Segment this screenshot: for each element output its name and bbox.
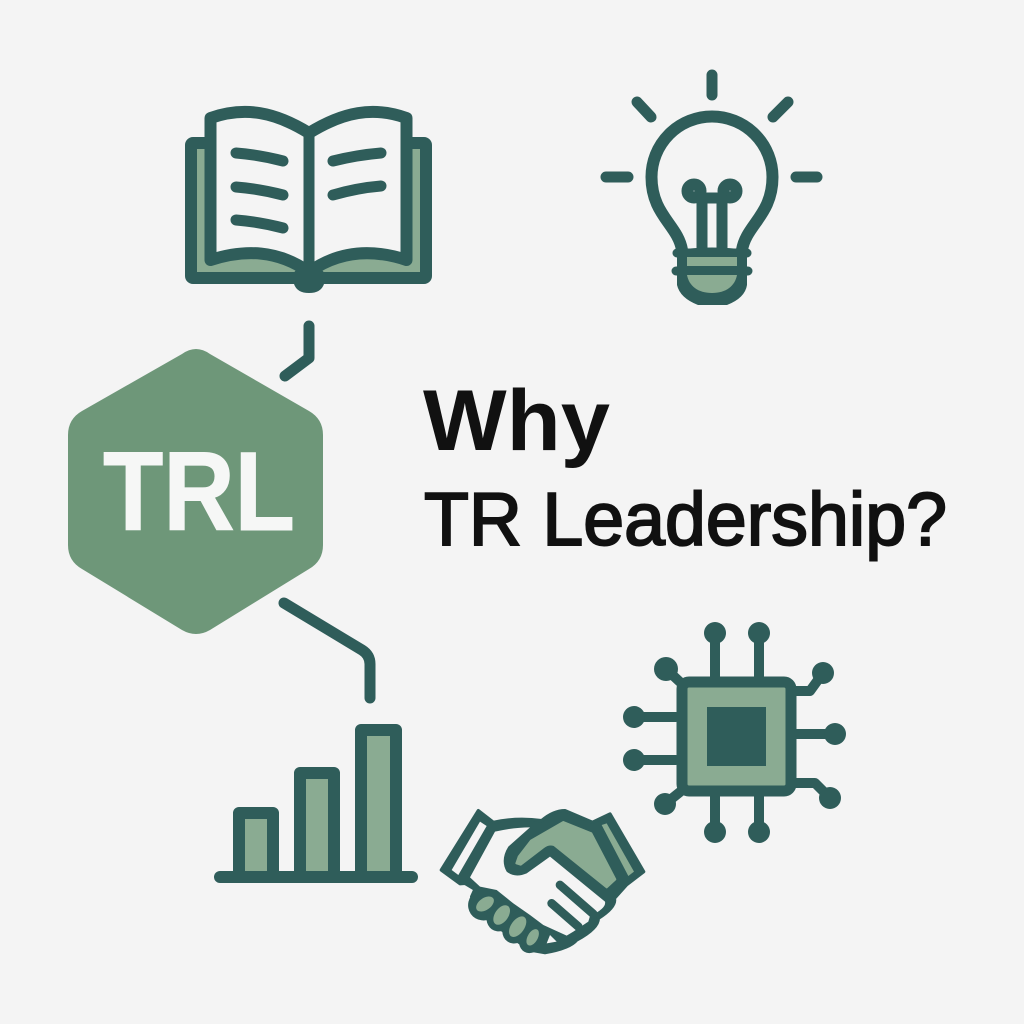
title — [423, 373, 947, 561]
icon: microchip — [623, 622, 846, 843]
fingers — [552, 885, 593, 927]
title: Why — [423, 373, 610, 469]
icon: handshake — [441, 811, 644, 958]
left cuff slit — [452, 822, 487, 875]
connector: book to hexagon — [285, 326, 309, 376]
icon: bar chart — [220, 730, 412, 877]
subtitle: TR Leadership? — [424, 477, 947, 561]
gap between fingers and wrist — [547, 935, 557, 943]
icon: open book — [191, 112, 426, 293]
lower hand — [470, 827, 605, 936]
badge label: TRL — [103, 429, 295, 554]
upper hand — [516, 822, 615, 887]
knuckle outlines — [462, 881, 552, 958]
handshake silhouette — [441, 811, 644, 953]
connector: hexagon to bar chart — [284, 603, 370, 698]
right cuff — [602, 823, 634, 876]
icon: light bulb — [606, 75, 817, 305]
hexagon badge — [68, 349, 323, 634]
knuckles — [473, 893, 541, 948]
